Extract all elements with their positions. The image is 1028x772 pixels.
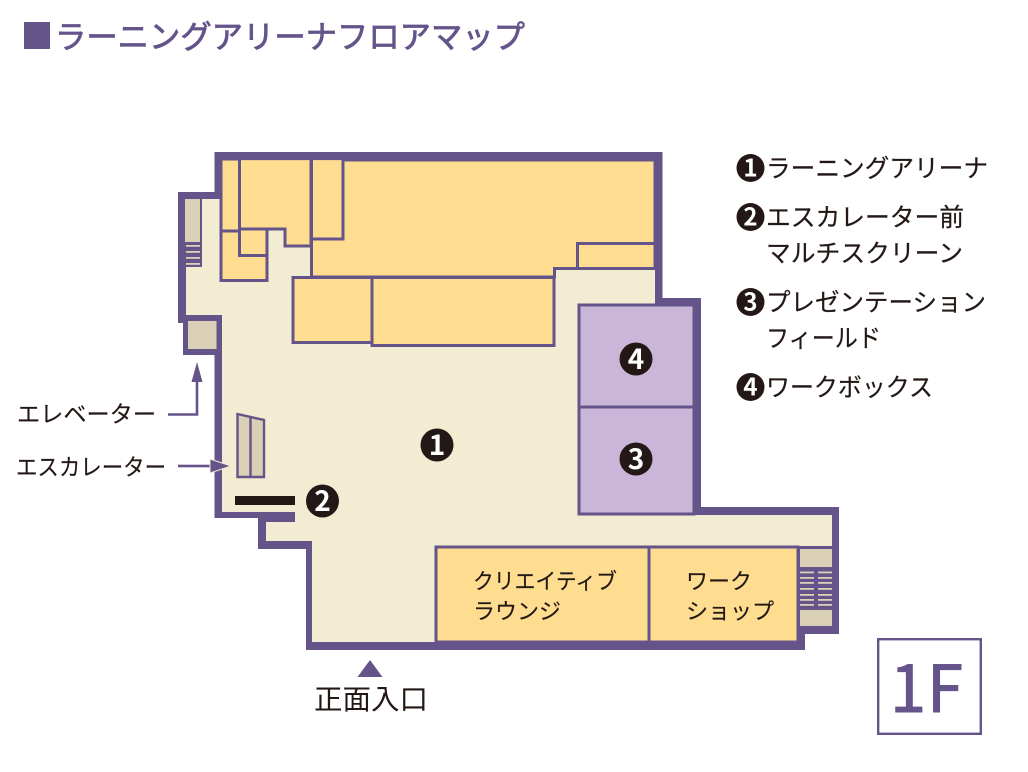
- left stairs: [178, 192, 202, 267]
- right edge wall: [655, 152, 662, 305]
- label: creative lounge: ラウンジ: [473, 599, 561, 624]
- black bar: multi screen: [235, 496, 295, 505]
- marker 2: 2: [314, 480, 331, 520]
- label: main entrance: 正面入口: [314, 684, 428, 715]
- escalator: [238, 414, 264, 477]
- label: escalator: エスカレーター: [16, 454, 166, 480]
- label: elevator: エレベーター: [17, 401, 156, 427]
- top edge wall: [214, 152, 662, 160]
- elevator: [188, 321, 216, 349]
- floor badge 1F: 1F: [890, 637, 963, 731]
- marker 3: [620, 438, 652, 478]
- legend item 2: 2: [743, 198, 758, 232]
- legend item 1: 1: [743, 148, 758, 184]
- legend item 4: 4: [743, 368, 758, 402]
- legend: [736, 148, 988, 402]
- marker 2: [306, 480, 339, 520]
- upper yellow rooms: [221, 159, 655, 346]
- right stairs: [798, 546, 832, 634]
- entrance triangle: [358, 660, 382, 677]
- bottom edge wall: [306, 642, 805, 650]
- marker 1: [420, 424, 454, 464]
- legend item 2: エスカレーター前: [766, 204, 964, 232]
- label: workshop: ワーク: [686, 569, 752, 594]
- label: creative lounge: クリエイティブ: [473, 569, 617, 594]
- label: workshop: ショップ: [686, 599, 774, 624]
- legend item 3: [736, 282, 986, 353]
- floor map: [178, 152, 839, 650]
- legend item 2: [736, 198, 964, 268]
- legend item 1: [736, 148, 988, 184]
- bottom rooms: [436, 547, 798, 642]
- marker 3: 3: [628, 438, 644, 478]
- marker 4: 4: [628, 338, 644, 378]
- outer wall: [178, 152, 839, 650]
- marker 1: 1: [429, 424, 445, 464]
- floor area: [186, 160, 832, 642]
- legend item 4: ワークボックス: [766, 374, 933, 402]
- legend item 2: マルチスクリーン: [766, 240, 963, 268]
- floor badge 1F: [878, 637, 981, 734]
- room 4 and room 3: [579, 305, 694, 514]
- legend item 3: プレゼンテーション: [766, 289, 986, 317]
- legend item 3: フィールド: [766, 325, 881, 353]
- arrow: escalator: [178, 459, 231, 473]
- legend item 3: 3: [743, 282, 758, 318]
- marker 4: [620, 338, 652, 378]
- legend item 1: ラーニングアリーナ: [766, 155, 988, 183]
- title: ラーニングアリーナフロアマップ: [55, 19, 525, 55]
- legend item 4: [736, 368, 933, 402]
- arrow: elevator: [168, 362, 202, 414]
